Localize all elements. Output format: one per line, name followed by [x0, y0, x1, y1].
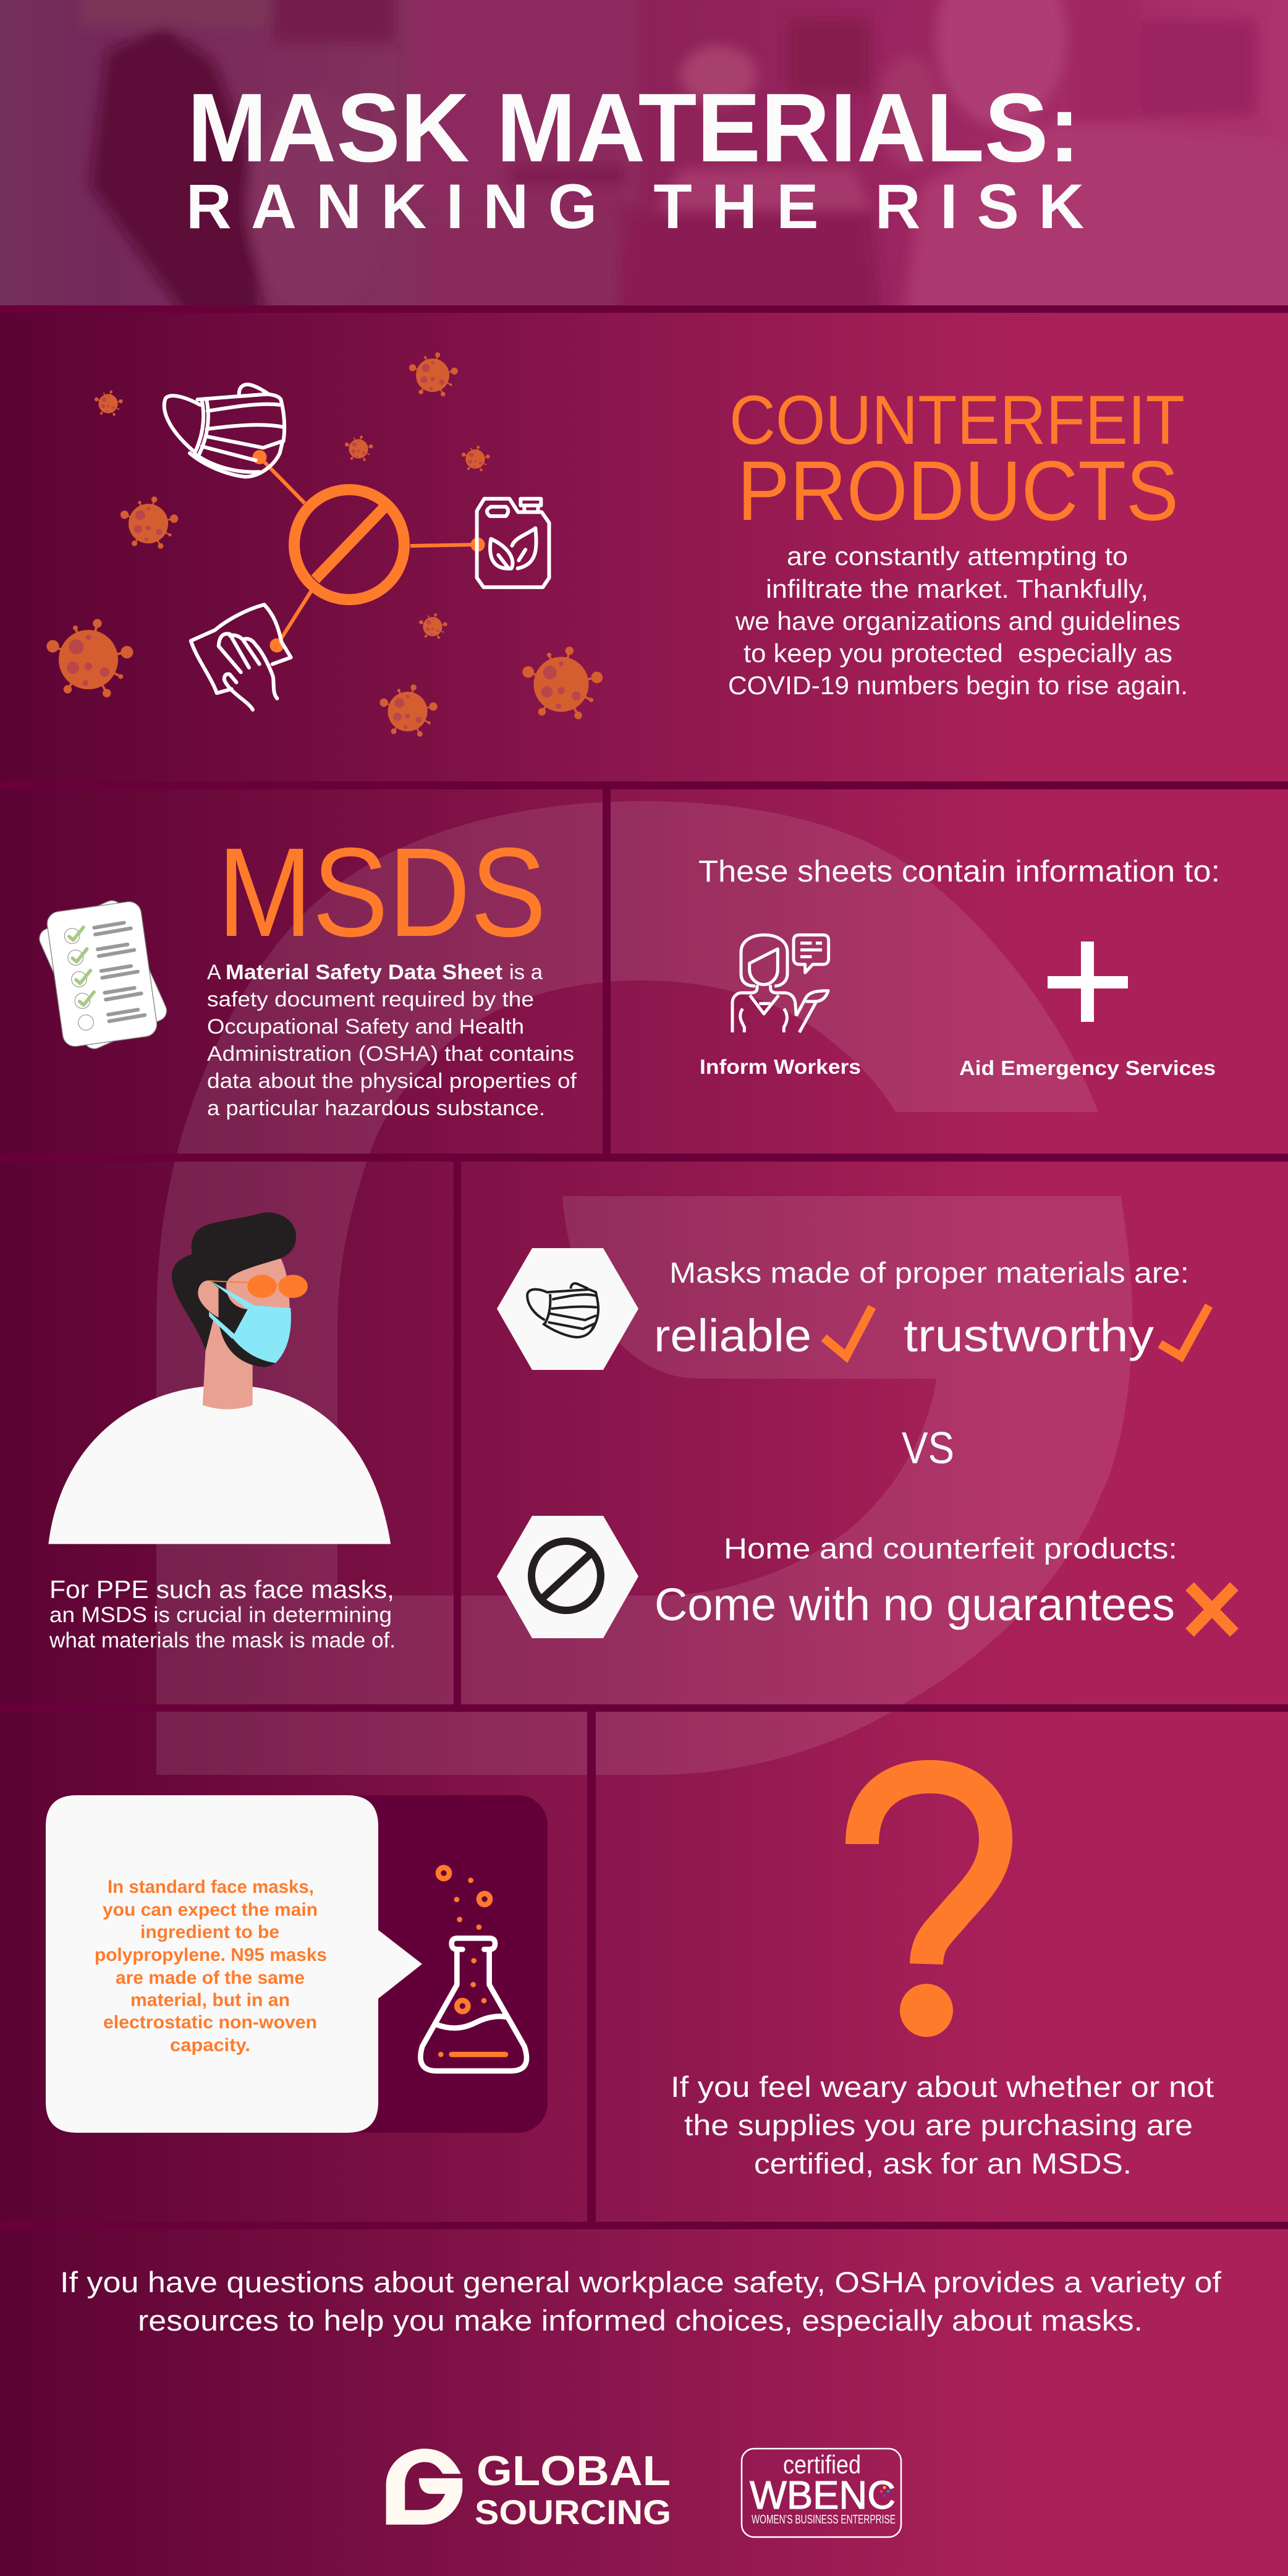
- illustration: man wearing mask: [48, 1212, 391, 1544]
- text block: PPE note: an MSDS is crucial in determining: [49, 1603, 392, 1627]
- footer text: OSHA resources: [60, 2266, 1222, 2337]
- word: reliable: reliable: [654, 1310, 811, 1361]
- text: come with no guarantees: Come with no guarantees: [655, 1579, 1175, 1630]
- logo: Global Sourcing: GLOBAL: [477, 2447, 671, 2494]
- badge: WBENC certified: WBENC: [750, 2473, 896, 2517]
- title: MASK MATERIALS:: [187, 74, 1080, 182]
- badge: WBENC certified: [742, 2449, 901, 2537]
- callout text: ingredient to be: [140, 1922, 279, 1942]
- icon: hexagon with mask: [497, 1248, 638, 1370]
- panel: sheet information: [698, 855, 1220, 1079]
- icon: plus sign: [1048, 942, 1128, 1022]
- icon: face mask outline: [164, 385, 284, 477]
- icon: prohibited sign with connectors: [252, 450, 485, 653]
- text block: MSDS definition: Occupational Safety and Health: [207, 1015, 524, 1039]
- header photo background: [0, 0, 1288, 321]
- text block: counterfeit description: we have organizations and guidelines: [735, 606, 1180, 635]
- text block: counterfeit description: to keep you protected especially as: [744, 639, 1172, 668]
- heading: counterfeit products: PRODUCTS: [737, 444, 1179, 538]
- text block: PPE note: [49, 1575, 396, 1652]
- heading: counterfeit products: COUNTERFEIT: [729, 381, 1185, 459]
- text block: MSDS definition: [207, 961, 577, 1120]
- text: masks made of proper materials: Masks made of proper materials are:: [669, 1256, 1189, 1289]
- footer text: OSHA resources: resources to help you make informed choices, especially about masks.: [138, 2304, 1143, 2337]
- dark flask card: [321, 1795, 548, 2133]
- callout text: material, but in an: [130, 1990, 290, 2010]
- text block: ask for MSDS: If you feel weary about whether or not: [671, 2070, 1214, 2103]
- speech bubble: [46, 1795, 422, 2133]
- icon: cross mark: [1190, 1586, 1234, 1633]
- panel: polypropylene callout: [46, 1795, 548, 2133]
- text block: PPE note: For PPE such as face masks,: [49, 1575, 394, 1604]
- text: home and counterfeit products: Home and counterfeit products:: [724, 1532, 1177, 1565]
- title: RANKING THE RISK: [186, 171, 1084, 242]
- text block: ask for MSDS: the supplies you are purchasing are: [684, 2109, 1193, 2141]
- callout text: you can expect the main: [103, 1900, 318, 1920]
- icon: hand with cloth: [191, 605, 291, 710]
- watermark: large G logo: [156, 801, 1132, 1775]
- title: [186, 74, 1084, 242]
- icon: worker with speech bubble: [732, 935, 829, 1032]
- text block: counterfeit description: [728, 542, 1188, 700]
- text: VS: VS: [902, 1424, 954, 1473]
- text block: MSDS definition: safety document required by the: [207, 988, 534, 1011]
- label: inform workers: Inform Workers: [700, 1055, 861, 1078]
- text block: MSDS definition: data about the physical properties of: [207, 1069, 577, 1093]
- callout text: polypropylene. N95 masks: [95, 1945, 327, 1965]
- panel: ask for an MSDS: [671, 1777, 1214, 2180]
- logo: Global Sourcing: SOURCING: [475, 2493, 671, 2531]
- text block: counterfeit description: COVID-19 numbers begin to rise again.: [728, 671, 1188, 700]
- text block: counterfeit description: infiltrate the market. Thankfully,: [766, 574, 1148, 603]
- panel: MSDS definition: [36, 822, 577, 1120]
- icon: checklist sheets: [36, 898, 170, 1052]
- badge: WBENC certified: WOMEN'S BUSINESS ENTERPRISE: [752, 2513, 896, 2527]
- icon: question mark: [862, 1777, 996, 2037]
- callout text: electrostatic non-woven: [103, 2012, 317, 2033]
- icon: flask: [420, 1868, 527, 2071]
- section dividers: [0, 305, 1288, 2229]
- text block: MSDS definition: Administration (OSHA) that contains: [207, 1042, 574, 1066]
- text block: MSDS definition: Material Safety Data Sheet: [226, 961, 502, 984]
- icon: check mark: [824, 1307, 872, 1356]
- text block: MSDS definition: is a: [509, 961, 543, 984]
- text block: counterfeit description: are constantly attempting to: [787, 542, 1128, 571]
- logo: Global Sourcing: [386, 2447, 671, 2531]
- text block: PPE note: what materials the mask is made of.: [49, 1628, 396, 1652]
- callout text: In standard face masks,: [108, 1877, 314, 1897]
- icon: hexagon with prohibited sign: [497, 1516, 638, 1638]
- callout text: are made of the same: [116, 1968, 305, 1988]
- heading: MSDS: MSDS: [218, 822, 546, 963]
- panel: PPE person: [48, 1212, 396, 1652]
- text block: MSDS definition: a particular hazardous substance.: [207, 1097, 545, 1120]
- word: trustworthy: trustworthy: [904, 1310, 1154, 1361]
- heading: counterfeit products: [729, 381, 1185, 538]
- panel: proper materials vs counterfeit: [497, 1248, 1234, 1638]
- viruses illustration: [46, 352, 603, 737]
- icon: sanitizer jug: [477, 499, 549, 587]
- label: aid emergency services: Aid Emergency Services: [959, 1056, 1216, 1079]
- footer text: OSHA resources: If you have questions about general workplace safety, OSHA provides a variety of: [60, 2266, 1222, 2298]
- icon: check mark: [1160, 1306, 1209, 1356]
- text block: ask for MSDS: [671, 2070, 1214, 2180]
- heading: these sheets contain: These sheets contain information to:: [698, 855, 1220, 888]
- panel: counterfeit products: [46, 352, 1188, 737]
- badge: WBENC certified: certified: [783, 2450, 861, 2479]
- text block: ask for MSDS: certified, ask for an MSDS.: [754, 2147, 1132, 2180]
- text block: MSDS definition: A: [207, 961, 221, 984]
- callout text: [95, 1877, 327, 2055]
- callout text: capacity.: [170, 2035, 250, 2055]
